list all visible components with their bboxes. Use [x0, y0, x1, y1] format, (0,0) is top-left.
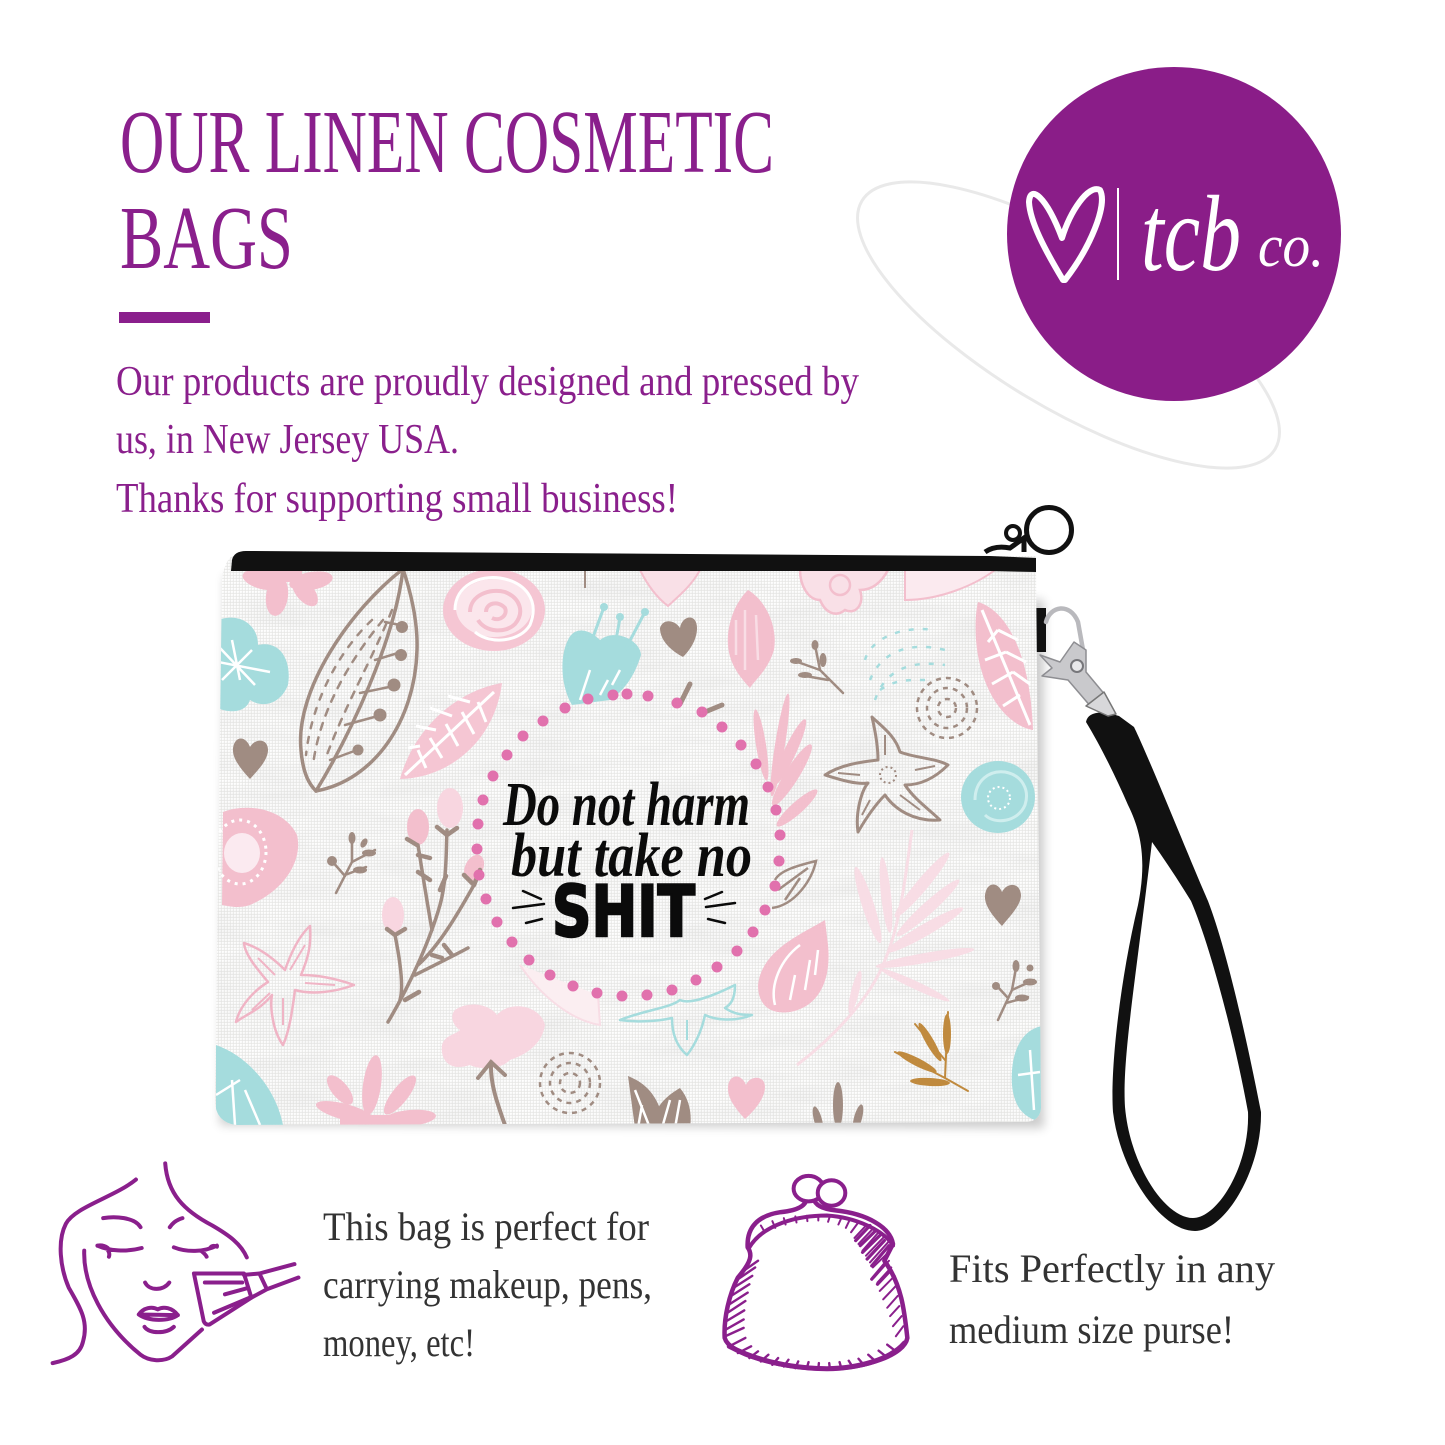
title	[120, 93, 774, 288]
bag slogan: Do not harm	[502, 771, 750, 839]
logo wordmark: tcb	[1141, 175, 1241, 294]
pattern: pale pink large sprig	[797, 830, 975, 1065]
pattern: pink heart bottom	[728, 1076, 765, 1119]
logo wordmark co: co.	[1258, 213, 1324, 279]
intro text block	[116, 359, 859, 522]
pattern: teal dots	[865, 629, 945, 700]
pattern: pale pink flower	[442, 1005, 545, 1068]
pattern: gold sprig	[895, 1012, 968, 1091]
logo badge	[1007, 67, 1341, 401]
bottom left text	[323, 1204, 652, 1365]
pattern: pink petal flower bottom	[314, 1054, 437, 1128]
pattern: brown outlined leaf	[301, 569, 417, 791]
icon: heart	[1029, 189, 1102, 280]
pattern: pink almond upper	[728, 590, 775, 688]
bag body	[205, 545, 1050, 1135]
pattern: small brown sprig	[327, 832, 376, 893]
pattern: small stem top	[584, 570, 586, 588]
pattern: pink flower top	[800, 565, 888, 614]
pattern: brown star flower	[825, 717, 948, 832]
pattern: teal corner shape	[216, 1045, 283, 1125]
decorative orbit ellipse	[819, 130, 1318, 520]
intro text block: us, in New Jersey USA.	[116, 417, 459, 463]
pattern: brown heart right	[985, 884, 1021, 926]
pattern: pink flower top centre	[640, 570, 700, 606]
bottom right text: Fits Perfectly in any	[949, 1246, 1275, 1291]
pattern: brown dashed circle upper	[917, 678, 977, 738]
pattern: brown heart left	[233, 738, 268, 779]
title underline bar	[119, 312, 210, 323]
pattern: pink almond	[758, 920, 829, 1013]
bag slogan	[502, 771, 752, 953]
icon: coin purse	[725, 1176, 907, 1369]
pattern: small sprig right	[992, 960, 1037, 1020]
pattern: brown dashed circle lower	[540, 1053, 600, 1113]
pattern: pink feather leaf	[400, 683, 502, 779]
pattern: branch with buds	[382, 788, 488, 1022]
pattern: teal flower left	[218, 618, 289, 711]
slogan accent lines	[513, 891, 735, 923]
pattern: brown buds on ring	[680, 684, 722, 712]
pattern: teal shape right	[1012, 1026, 1042, 1122]
pattern: pink leaf right	[976, 602, 1033, 730]
pattern: pale leaf top right	[905, 570, 995, 600]
pattern: pink rose	[443, 569, 545, 651]
pattern: pink star flower	[236, 926, 354, 1045]
pattern: brown arrow stem	[478, 1062, 506, 1128]
pattern: small brown leaf right of ring	[772, 861, 816, 908]
bottom right text	[949, 1246, 1275, 1352]
bag slogan: but take no	[511, 822, 752, 890]
product: cosmetic bag with strap	[205, 508, 1261, 1231]
dotted ring	[472, 688, 786, 1002]
pattern: brown feather leaf bottom	[628, 1076, 691, 1128]
bag shadow	[220, 575, 1044, 1128]
pattern: sprig upper right	[790, 640, 843, 693]
pattern: brown heart upper	[660, 617, 697, 657]
strap	[1086, 713, 1261, 1231]
pattern: teal scribble circle	[961, 761, 1035, 833]
zipper tape	[231, 551, 1036, 572]
logo divider	[1117, 188, 1119, 280]
title: BAGS	[120, 189, 293, 288]
bottom left text: This bag is perfect for	[323, 1204, 649, 1249]
pattern: pink fronds	[754, 694, 818, 827]
pattern: pale pink leaf lower ring	[520, 965, 600, 1025]
pattern: pink flower top left	[242, 571, 333, 616]
icon: face with makeup brush	[53, 1163, 298, 1363]
bottom left text: carrying makeup, pens,	[323, 1262, 652, 1307]
title: OUR LINEN COSMETIC	[120, 93, 774, 192]
intro text block: Our products are proudly designed and pressed by	[116, 359, 859, 405]
zipper ring and pull	[985, 508, 1072, 552]
intro text block: Thanks for supporting small business!	[116, 476, 678, 522]
bag slogan: SHIT	[552, 871, 695, 953]
pattern: teal flower with stamens	[562, 603, 649, 705]
bottom right text: medium size purse!	[949, 1307, 1234, 1352]
pattern: teal star outline	[620, 985, 752, 1055]
lobster clasp	[1036, 608, 1116, 716]
bottom left text: money, etc!	[323, 1320, 475, 1365]
pattern: pink blob flower	[214, 808, 298, 907]
pattern: brown tuft	[812, 1082, 864, 1123]
